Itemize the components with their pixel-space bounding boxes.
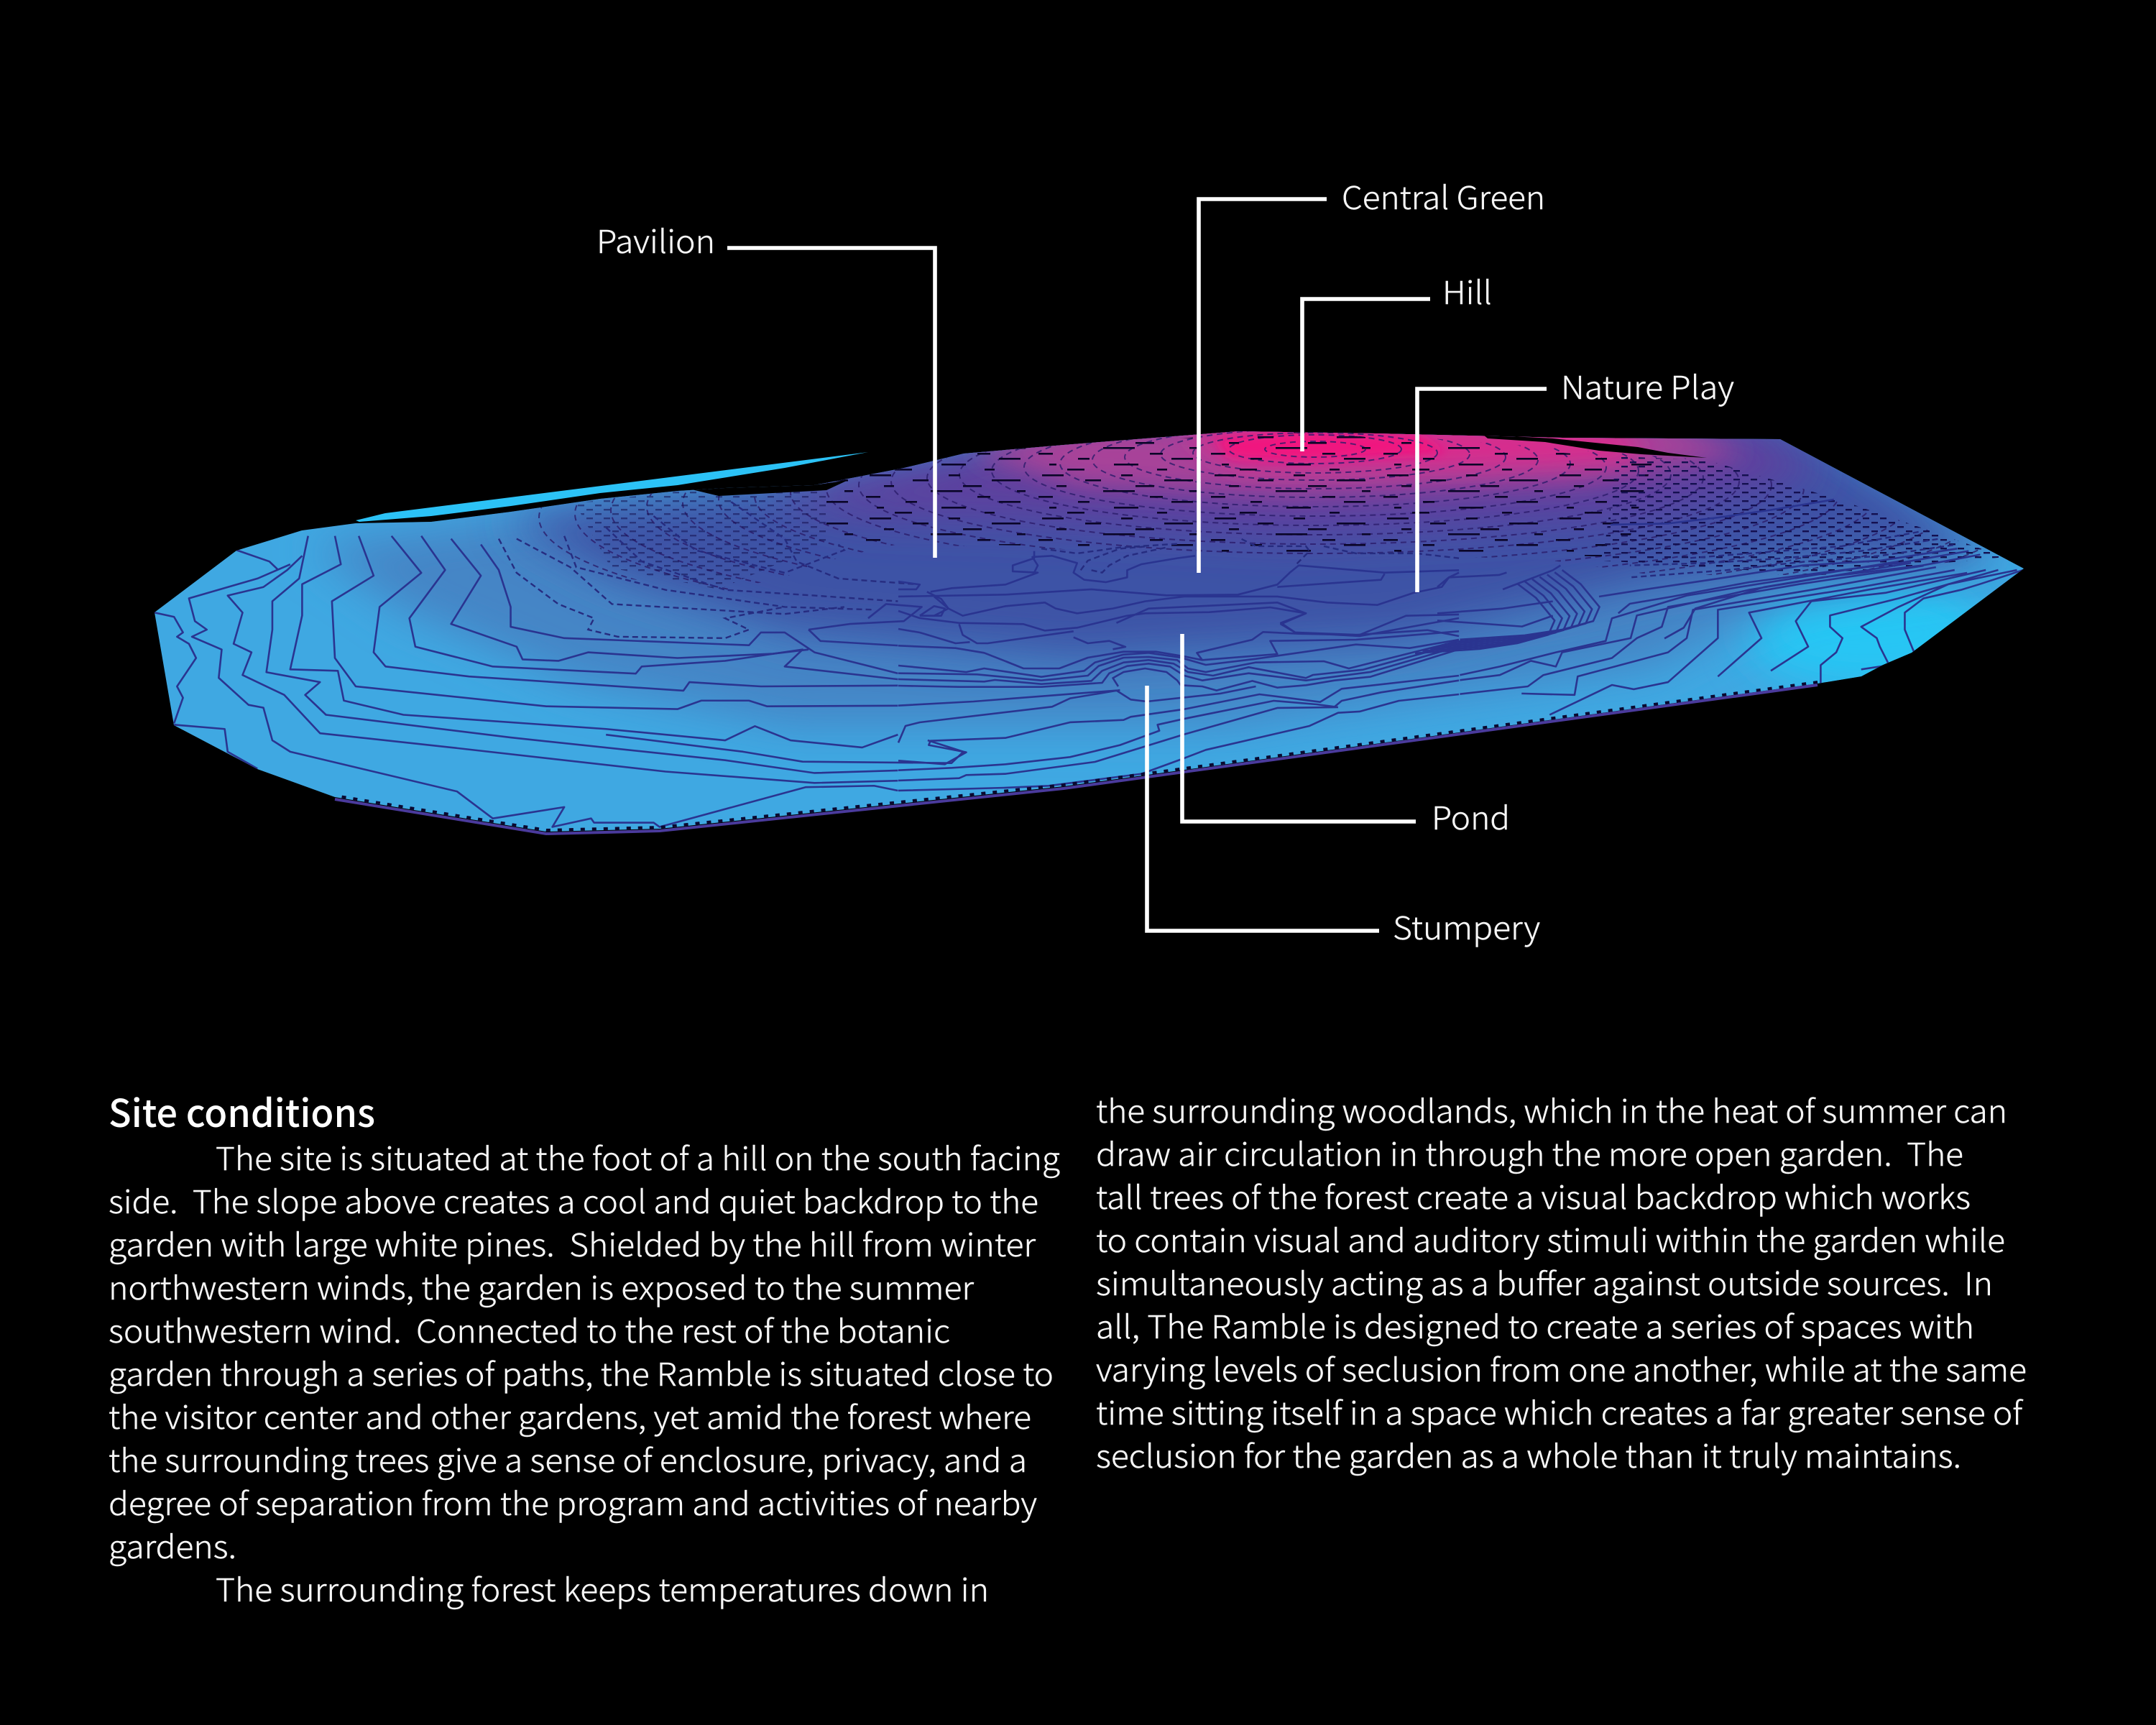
text block: right column	[1096, 1086, 2027, 1477]
text block: left column: garden with large white pines. Shielded by the hill from winter	[109, 1220, 1036, 1266]
label: Central Green	[1199, 172, 1545, 573]
label: Hill: Hill	[1442, 267, 1492, 313]
text block: right column: to contain visual and auditory stimuli within the garden while	[1096, 1215, 2005, 1261]
terrain: coloured height surface	[155, 431, 2024, 832]
label: Pavilion	[596, 216, 935, 558]
terrain: horizontal dash field on the hill slope	[826, 424, 1660, 561]
terrain: front contours around the Stumpery and Pond	[898, 607, 1459, 791]
terrain: right slope contours converging on the tip	[1437, 500, 1980, 638]
text block: left column: garden through a series of paths, the Ramble is situated close to	[109, 1349, 1054, 1395]
text block: right column: tall trees of the forest create a visual backdrop which works	[1096, 1172, 1971, 1218]
label: Stumpery: Stumpery	[1393, 903, 1540, 949]
text block: right column: simultaneously acting as a buffer against outside sources. In	[1096, 1259, 1993, 1305]
label: Pond: Pond	[1432, 793, 1510, 839]
text block: left column: The surrounding forest keeps temperatures down in	[216, 1565, 989, 1611]
heading: Site conditions: Site conditions	[109, 1084, 375, 1138]
label: Nature Play: Nature Play	[1561, 362, 1734, 408]
terrain: centre contours (Pavilion to Nature Play basins)	[898, 539, 1459, 635]
text block: right column: varying levels of seclusion from one another, while at the same	[1096, 1345, 2027, 1391]
text block: left column: degree of separation from the program and activities of nearby	[109, 1478, 1037, 1524]
terrain: back-right black gap	[1483, 435, 1707, 458]
terrain: back-left black gap	[683, 480, 848, 496]
label: Pond	[1182, 634, 1510, 839]
text block: left column: side. The slope above creates a cool and quiet backdrop to the	[109, 1177, 1038, 1223]
terrain map: contour surface of the site	[155, 431, 2024, 835]
terrain: front dotted edge	[335, 682, 1818, 834]
text block: right column: the surrounding woodlands, which in the heat of summer can	[1096, 1086, 2007, 1132]
text block: right column: all, The Ramble is designed to create a series of spaces with	[1096, 1302, 1974, 1348]
label: Stumpery	[1147, 686, 1540, 949]
terrain: stippled upper slope contours	[538, 431, 1982, 589]
terrain: back cyan strip	[356, 452, 868, 522]
text block: left column: the visitor center and other gardens, yet amid the forest where	[109, 1392, 1031, 1438]
label: Central Green: Central Green	[1342, 172, 1545, 218]
text block: left column	[109, 1133, 1060, 1611]
terrain: left contours	[155, 502, 964, 827]
text block: left column: gardens.	[109, 1522, 236, 1568]
text block: right column: seclusion for the garden as a whole than it truly maintains.	[1096, 1431, 1961, 1477]
text block: right column: draw air circulation in through the more open garden. The	[1096, 1129, 1963, 1175]
terrain: right contours	[1415, 561, 2023, 714]
text block: left column: the surrounding trees give a sense of enclosure, privacy, and a	[109, 1435, 1027, 1481]
label: Hill	[1302, 267, 1492, 451]
label: Pavilion: Pavilion	[596, 216, 715, 262]
text block: right column: time sitting itself in a space which creates a far greater sense of	[1096, 1388, 2024, 1434]
terrain: fine dot field on left slope	[578, 484, 826, 588]
text block: left column: The site is situated at the foot of a hill on the south facing	[216, 1133, 1060, 1179]
text block: left column: northwestern winds, the garden is exposed to the summer	[109, 1263, 974, 1309]
text block: left column: southwestern wind. Connected to the rest of the botanic	[109, 1306, 950, 1352]
terrain: fine dot field on right slope	[1604, 457, 1999, 575]
label: Nature Play	[1417, 362, 1734, 592]
